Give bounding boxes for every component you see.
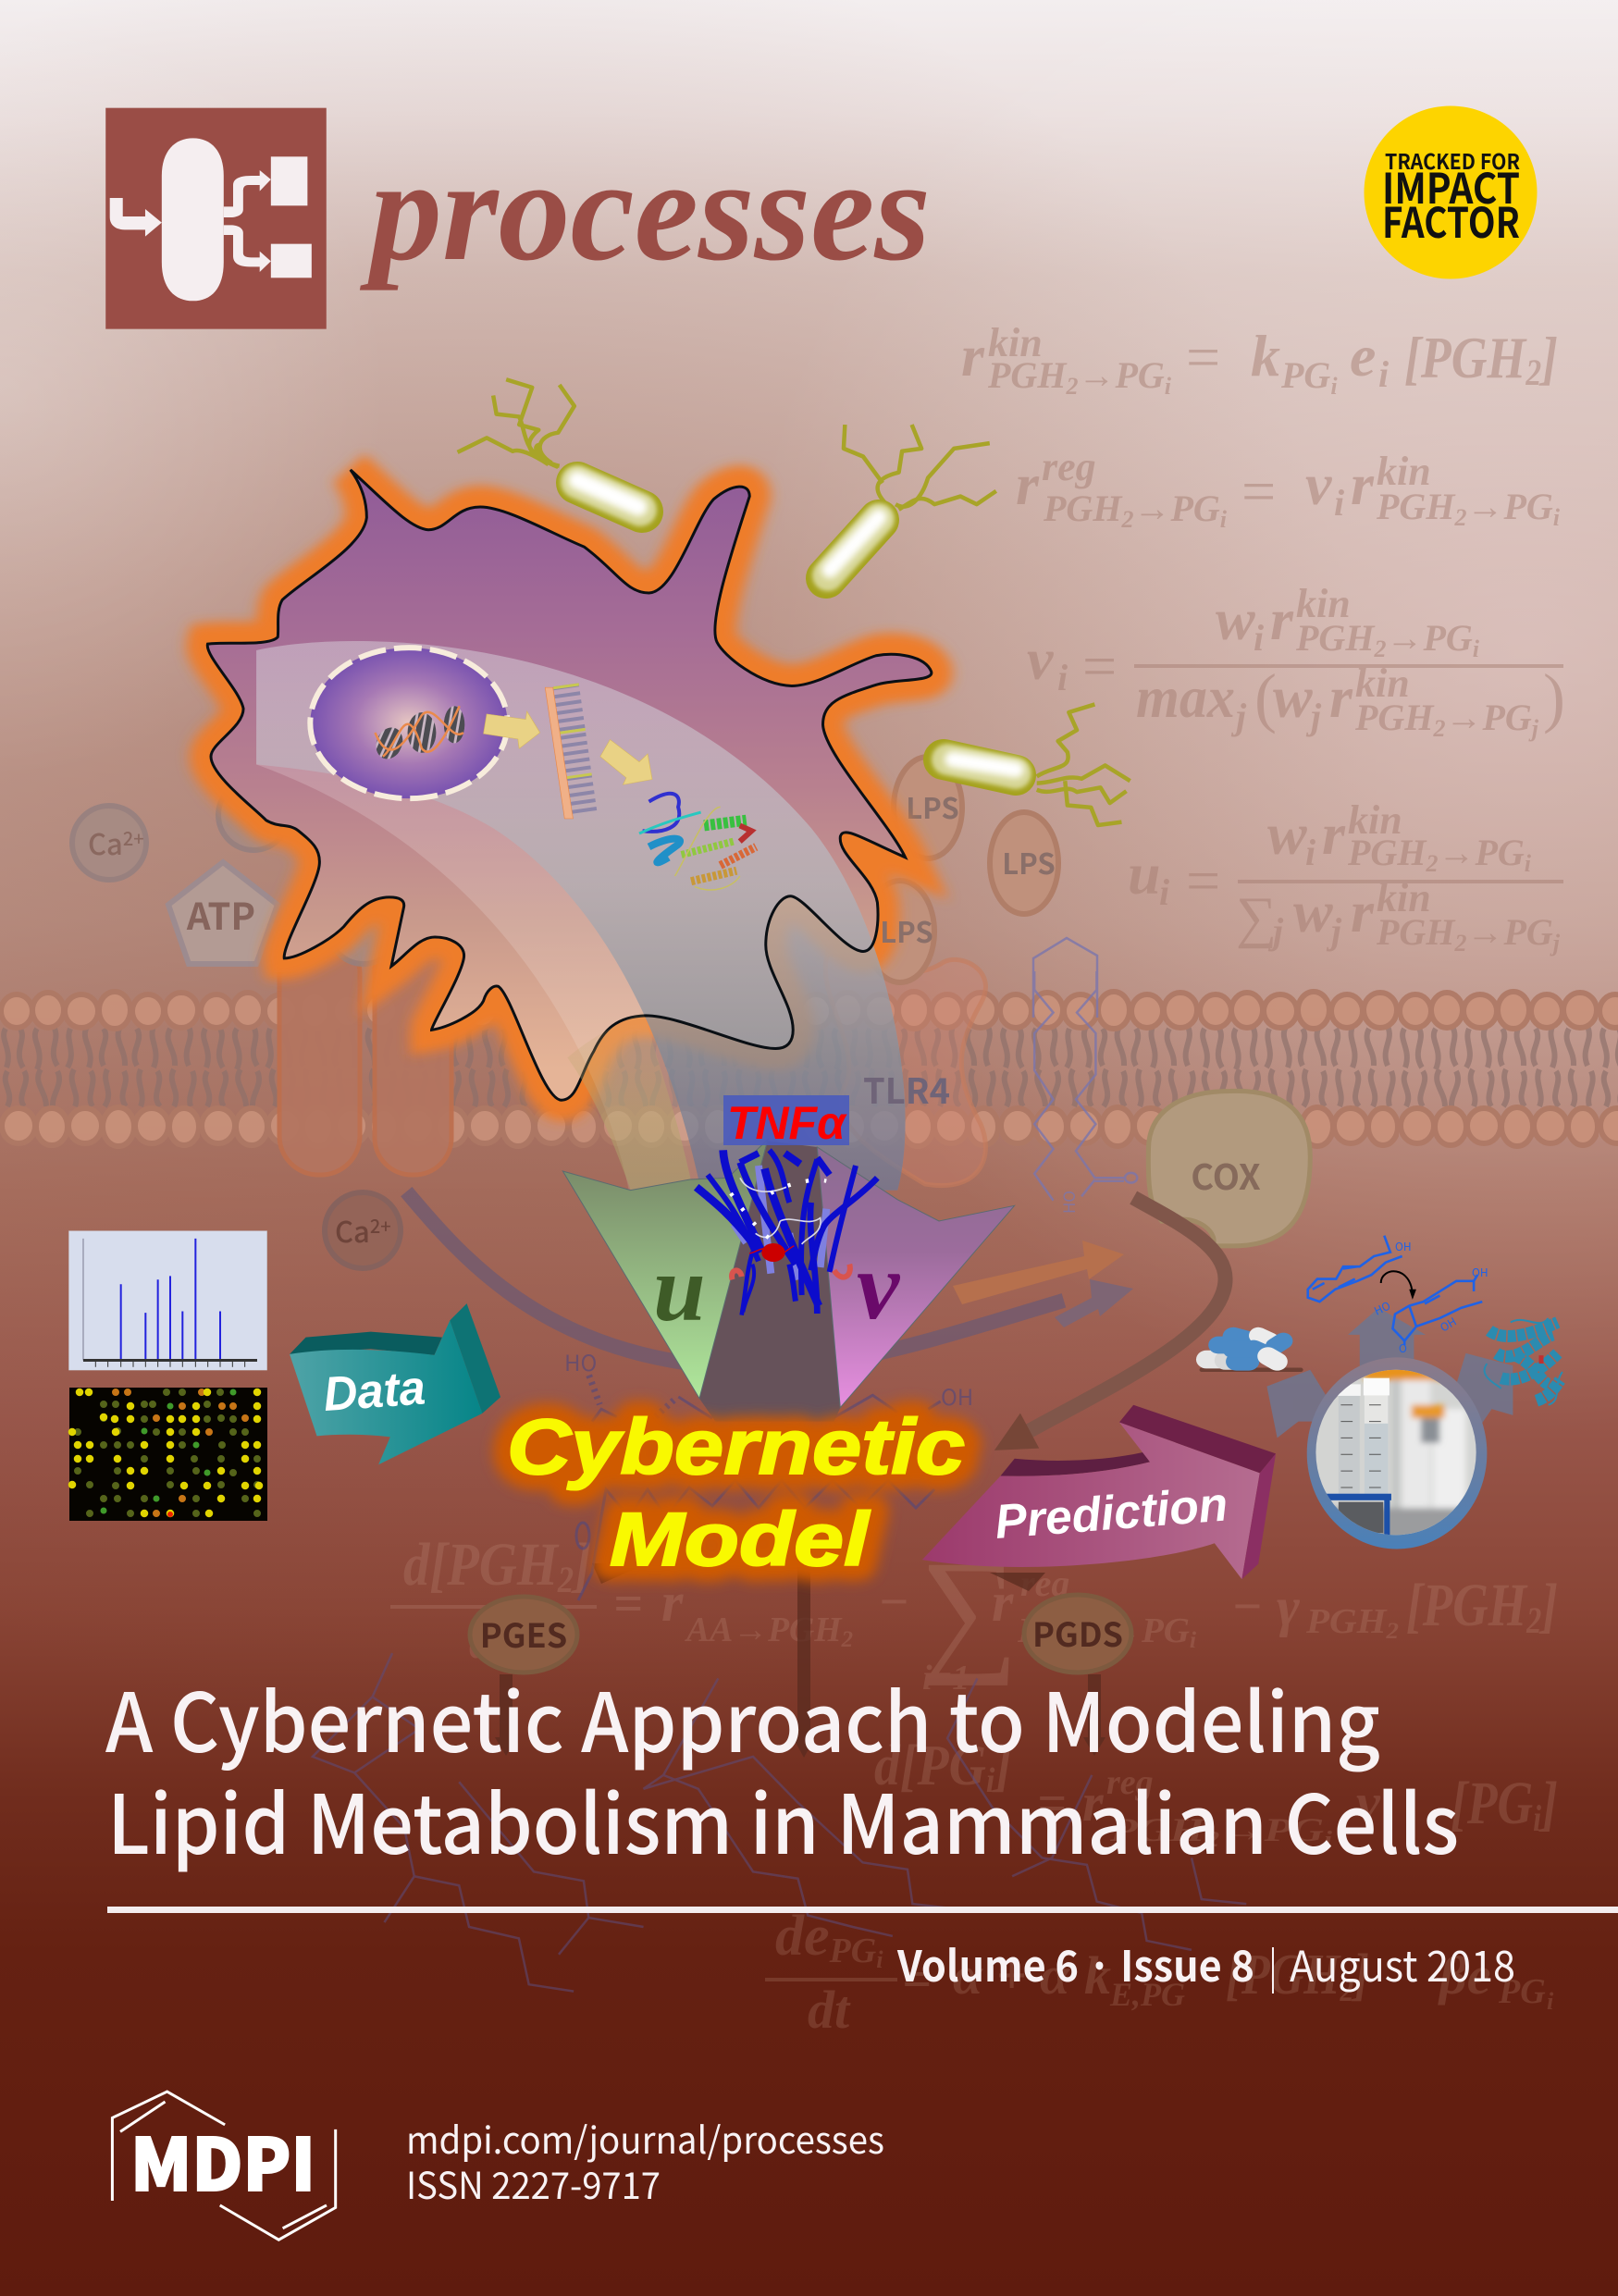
arachidonic acid molecule: HO [1056,1191,1080,1214]
equation: v_i: kin [1355,660,1410,706]
equation: v_i: PGH [1296,617,1374,659]
Ca2+ labels: Ca [88,821,123,863]
equation: r reg: PGH [1044,488,1121,529]
equation: r reg: 2 [1453,504,1466,531]
equation: r kin: k [1251,323,1280,389]
bottom equations (faint): = [902,1951,932,2008]
bottom equations (faint): 2 [841,1627,853,1652]
faint prostaglandin molecules [313,1653,1246,1992]
TNF-alpha label: TNFα [727,1097,847,1149]
prostaglandin reaction scheme [1308,1236,1482,1345]
grey overlap of flux band [256,641,906,1191]
equation: r reg: →PG [1466,486,1553,527]
bottom equations (faint): PGH [1306,1602,1380,1641]
article title [105,1659,1459,1878]
arrow: orange signal [953,1241,1124,1304]
prostaglandin atom labels: OH [1472,1265,1488,1280]
bottom equations (faint): i=1 [922,1659,970,1697]
equation: u_i: i [1525,850,1532,877]
equation: r reg: 2 [1120,506,1133,533]
equation: u_i: kin [1348,797,1402,843]
bottom equations (faint): de [775,1905,830,1968]
bottom equations (faint): 2 [1340,1971,1353,2008]
equation: r reg: reg [1042,444,1096,489]
equation: r reg: PGH [1377,486,1454,527]
bottom equations (faint): i [1190,1628,1196,1653]
equation: r kin: r [961,323,985,389]
yellow lettering: Cybernetic [507,1403,965,1490]
LPS molecules: LPS [1002,841,1056,883]
PGDS enzyme [1024,1595,1131,1673]
bottom equations (faint): PG [1498,1972,1546,2011]
bottom equations (faint): PG [829,1932,877,1970]
equation: u_i: = [1186,847,1220,915]
equation: v_i: 2 [1432,715,1445,742]
yellow lettering: Model [610,1498,871,1582]
bottom equations (faint): PGH [1018,1611,1092,1650]
u arrow [562,1140,768,1399]
equation: v_i: w [1273,664,1313,730]
Ca2+ labels [88,821,391,1251]
bottom equations (faint): 2 [1525,1599,1541,1641]
LPS molecules [866,757,1058,982]
impact factor badge: IMPACT [1382,155,1520,216]
experiment output group [1202,1236,1562,1549]
MDPI logo [112,2092,336,2240]
prostaglandin atom labels: O [1399,1340,1407,1356]
bottom equations (faint): ] [571,1531,591,1599]
journal web and ISSN [406,2111,884,2210]
TNF-alpha protein [697,1150,877,1315]
Ca2+ labels: 2+ [370,1212,391,1239]
faint molecule behind model title: HO [564,1345,597,1377]
bottom equations (faint): E,PG [1109,1976,1185,2013]
equation: v_i: = [1082,633,1117,700]
equation: u_i: j [1326,910,1342,952]
equation: u_i: ∑ [1236,886,1277,949]
title rule [107,1907,1618,1913]
equation: r kin: 2 [1525,352,1541,393]
journal name: processes [359,130,931,291]
equation: v_i: ( [1254,660,1277,734]
bottom equations (faint): ] [1351,1944,1369,2006]
bottom equations (faint): i [1533,1797,1541,1839]
centre overlap wedge [699,1141,840,1422]
journal logo [105,108,327,329]
equation: v_i: →PG [1445,697,1532,738]
arrow: translation [600,739,652,784]
bottom equations (faint): [PGH [1406,1572,1555,1639]
bottom equations (faint): = [613,1575,643,1633]
bottom equations (faint): ] [1538,1572,1558,1639]
protein ribbon [639,794,756,890]
TLR4 receptor [825,953,985,1186]
letter u: u [653,1237,706,1341]
prostaglandin atom labels [1372,1239,1488,1356]
Ca2+ labels: Ca [335,1209,370,1251]
equation: u_i: kin [1377,875,1431,920]
equation: u_i: r [1322,801,1346,867]
equation: u_i: PGH [1348,832,1426,873]
bottom equations (faint): − [1231,1578,1263,1636]
equation: v_i [1027,581,1565,742]
equation: v_i: ) [1543,660,1565,734]
arachidonic acid molecule [1033,938,1137,1214]
equation: v_i: 2 [1373,636,1386,662]
cell body [207,470,932,1100]
pathway arrows to products [495,1563,1105,1758]
equation: v_i: w [1216,586,1255,652]
ATP pentagon: ATP [186,887,255,941]
bottom equations (faint): γ [1277,1576,1300,1637]
equation: v_i: i [1254,617,1264,659]
equation: v_i: j [1528,715,1539,742]
bacterium 3 [944,704,1130,825]
glow: Model [610,1498,871,1582]
bottom equations (faint): 2 [1385,1619,1399,1644]
equation: v_i: r [1270,586,1294,652]
Ca2+ labels: 2+ [123,824,144,851]
equation: v_i: i [1473,636,1480,662]
bottom equations (faint): d[PG [874,1734,998,1797]
macrophage cell [207,470,932,1191]
arrow: substrate to products [994,1198,1226,1450]
bottom equations (faint): v [1356,1772,1381,1833]
bottom equations (faint): d[PGH [403,1531,583,1599]
yellow lettering [507,1403,965,1582]
output arrows [1266,1308,1513,1438]
impact factor badge: TRACKED FOR [1385,144,1520,176]
bottom equations (faint): reg [1106,1763,1154,1802]
bottom equations (faint): dt [808,1980,851,2040]
bottom equations (faint): [PGH [1226,1944,1366,2006]
equation: v_i: j [1305,696,1322,737]
prostaglandin atom labels: HO [1372,1298,1393,1319]
equation: r kin: ] [1538,325,1558,390]
equation: u_i: →PG [1438,832,1525,873]
issue line: August 2018 [1290,1933,1515,1994]
MDPI logo: MDPI [130,2108,315,2212]
equation: r kin: i [1378,353,1389,395]
issue line: Volume 6 · Issue 8 [896,1933,1254,1994]
issue line [896,1933,1515,1994]
equation: r kin: PG [1281,354,1330,396]
cell outline [207,470,932,1100]
equation: r kin: e [1350,323,1376,389]
membrane channel protein [279,934,451,1175]
bacterium 1 [458,379,642,512]
article title: A Cybernetic Approach to Modeling [105,1659,1380,1776]
bottom equations (faint): ] [992,1734,1012,1797]
equation: r kin: PGH [988,354,1066,396]
icon: DNA helix [373,706,464,761]
equation: v_i: i [1057,657,1068,698]
bottom equations (faint): AA→PGH [686,1611,843,1649]
equation: u_i: w [1293,879,1333,944]
lab photo: test tubes [1315,1369,1476,1536]
bottom equations (faint): dt [469,1612,511,1670]
bottom equations (faint): ] [1538,1770,1558,1837]
bottom equations (faint): i [1547,1988,1554,2015]
equation: r reg [1016,444,1561,533]
bottom equations (faint): 2 [1093,1628,1105,1653]
faint molecule behind model title [564,1345,973,1600]
prostaglandin atom labels: OH [1395,1239,1412,1254]
mass spectrum panel [69,1231,267,1370]
nucleus [310,648,756,890]
bottom equations (faint): reg [1020,1562,1069,1604]
TLR4 label: TLR4 [863,1063,950,1114]
icon: pills [1202,1336,1301,1370]
impact factor badge: FACTOR [1382,190,1520,250]
translucent outer flux band [256,641,906,1191]
equation: v_i: max [1136,664,1235,730]
equation: r reg: kin [1377,449,1431,494]
prostaglandin atom labels: OH [1438,1314,1459,1335]
bottom equations (faint): α + α [953,1945,1070,2006]
upper equations [961,320,1565,957]
cell orange glow [207,470,932,1100]
equation: u_i: i [1159,871,1169,913]
equation: r reg: i [1553,504,1561,531]
Data arrow [290,1303,500,1464]
PGES enzyme [470,1597,577,1673]
equation: u_i: j [1267,910,1284,952]
equation: v_i: j [1230,696,1247,737]
third LPS label over glow: LPS [880,909,933,951]
bottom equations (faint): PGH [1110,1811,1180,1848]
article title: Lipid Metabolism in Mammalian Cells [107,1760,1459,1878]
equation: u_i: r [1351,879,1375,944]
equation: u_i: 2 [1425,850,1438,877]
equation: u_i: PGH [1377,911,1454,953]
Cybernetic Model title [507,1403,965,1582]
LPS molecules: LPS [906,785,959,827]
arrow: blue curved signal [406,1191,1133,1367]
equation: r kin: kin [988,320,1043,365]
v arrow [817,1147,1015,1408]
journal web and ISSN: ISSN 2227-9717 [406,2156,661,2210]
equation: r reg: i [1220,506,1228,533]
equation: r reg: r [1351,451,1375,517]
equation: v_i: PGH [1355,697,1433,738]
bottom equations (faint): ∑ [920,1533,1019,1686]
bottom equations (faint) [390,1531,1558,2040]
bottom equations (faint): →PG [1219,1811,1324,1848]
equation: v_i: v [1027,626,1054,692]
bottom equations (faint): →PG [1105,1611,1190,1650]
equation: r reg: →PG [1133,488,1220,529]
equation: r kin: [PGH [1404,325,1549,390]
COX enzyme [1148,1091,1310,1246]
equation: r reg: i [1334,482,1344,524]
glow: Cybernetic [507,1403,965,1490]
lab photo ring [1307,1357,1487,1549]
bottom equations (faint): r [661,1572,684,1633]
COX enzyme: COX [1191,1149,1261,1200]
bottom equations (faint): = [1037,1775,1067,1833]
equation: r kin: 2 [1065,373,1078,400]
equation: r kin: i [1330,373,1338,400]
bottom equations (faint): r [992,1572,1014,1633]
bottom equations (faint): r [1082,1772,1104,1833]
mRNA strand [545,685,584,819]
equation: u_i: →PG [1466,911,1553,953]
ATP pentagon [168,862,278,964]
equation: v_i: r [1329,664,1353,730]
impact factor badge [1364,105,1538,279]
equation: u_i: j [1550,930,1561,957]
PGDS enzyme: PGDS [1032,1609,1123,1657]
equation: r kin: i [1165,373,1172,400]
glow [507,1403,965,1582]
equation: r kin: = [1186,324,1220,391]
equation: u_i: w [1267,801,1307,867]
journal web and ISSN: mdpi.com/journal/processes [406,2111,884,2165]
equation: v_i: →PG [1386,617,1473,659]
letter v: v [857,1233,901,1339]
PGES enzyme: PGES [480,1610,567,1658]
Prediction arrow [922,1405,1276,1579]
equation: r reg: r [1016,451,1040,517]
calcium ions [72,780,401,1268]
lower stem tint [567,1011,691,1191]
equation: r reg: v [1305,451,1332,517]
bottom equations (faint): i [1324,1828,1332,1852]
bottom equations (faint): 2 [1204,1828,1219,1852]
bottom equations (faint): 2 [557,1559,574,1600]
Prediction arrow: Prediction [993,1477,1229,1549]
equation: u_i: 2 [1453,930,1466,957]
equation: r reg: = [1241,458,1276,525]
bottom equations (faint): βe [1438,1945,1490,2006]
microarray panel [69,1388,267,1521]
equation: u_i [1128,797,1563,957]
faint molecule behind model title: OH [941,1379,973,1412]
equation: u_i: i [1305,832,1315,873]
bottom equations (faint): i [876,1946,883,1973]
bottom equations (faint): [PG [1451,1770,1552,1837]
bottom equations (faint): k [1084,1945,1111,2006]
cell membrane lipid bilayer [0,986,1618,1149]
arrow: transcription [484,711,540,748]
teal protein structure [1485,1318,1562,1405]
equation: r kin [961,320,1558,400]
equation: v_i: kin [1296,581,1351,626]
bottom equations (faint): i [986,1761,995,1800]
equation: u_i: u [1128,841,1161,907]
Data arrow: Data [322,1361,427,1422]
bottom equations (faint): − [878,1574,909,1631]
equation: r kin: →PG [1078,354,1165,396]
bacterium 2 [826,425,996,578]
